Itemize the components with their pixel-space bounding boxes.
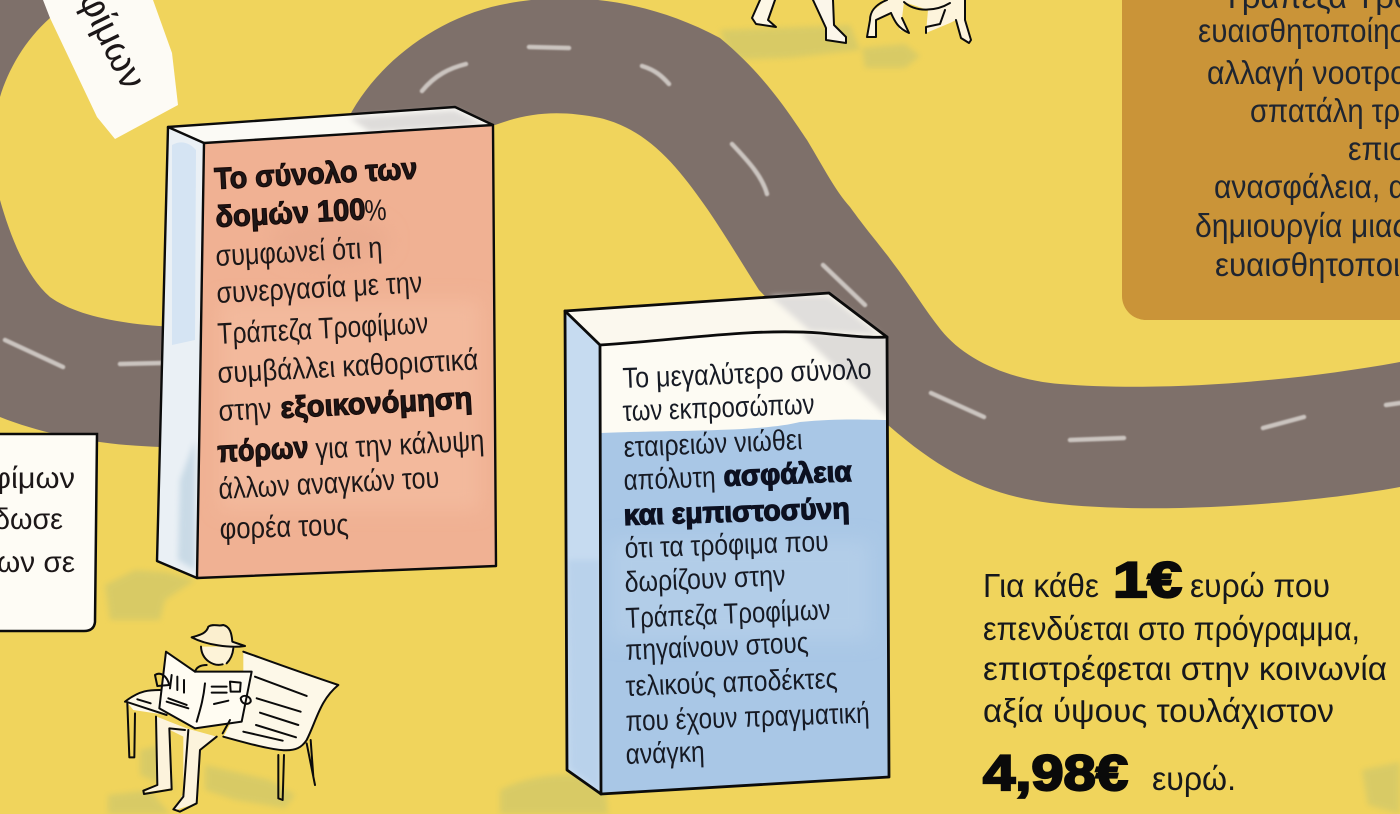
callout: return on investment: αξία ύψους τουλάχιστον — [983, 692, 1334, 729]
callout: return on investment — [983, 552, 1387, 801]
box text: συμβάλλει καθοριστικά — [217, 343, 479, 390]
callout: return on investment: 1€ — [1113, 552, 1182, 608]
box text: και εμπιστοσύνη — [623, 493, 850, 532]
callout: return on investment: επενδύεται στο πρόγραμμα, — [983, 610, 1360, 647]
box front face — [197, 125, 496, 578]
box text: τελικούς αποδέκτες — [625, 663, 838, 703]
icon: walker legs and dog — [752, 0, 971, 43]
box side and top faces — [565, 293, 887, 794]
panel: blue box — [565, 293, 890, 800]
box text: ασφάλεια — [723, 456, 852, 493]
box text: εταιρειών νιώθει — [623, 424, 803, 464]
banner with rotated text — [42, 0, 178, 139]
box text: που έχουν πραγματική — [625, 697, 870, 738]
box text: άλλων αναγκών του — [218, 461, 440, 506]
box text: για την κάλυψη — [315, 424, 485, 466]
box text: πηγαίνουν στους — [625, 627, 809, 667]
box front face — [600, 332, 889, 794]
box text: στην — [218, 392, 272, 428]
box text: ανάγκη — [625, 736, 705, 771]
box text: πόρων — [217, 431, 309, 469]
box outline — [157, 107, 496, 578]
box text: Τράπεζα Τροφίμων — [625, 594, 831, 635]
callout: return on investment: 4,98€ — [983, 745, 1128, 801]
box outline — [565, 293, 889, 794]
callout: return on investment: Για κάθε — [983, 567, 1099, 604]
box text: δομών 100 — [215, 193, 366, 234]
box text: συμφωνεί ότι η — [215, 231, 383, 273]
callout: return on investment: επιστρέφεται στην κοινωνία — [983, 650, 1387, 687]
callout: return on investment: ευρώ. — [1152, 760, 1236, 797]
box text: φορέα τους — [219, 509, 349, 546]
box text: Τράπεζα Τροφίμων — [217, 307, 429, 351]
box text — [622, 353, 872, 771]
box text: Το μεγαλύτερο σύνολο — [622, 353, 872, 395]
callout: return on investment: ευρώ που — [1190, 567, 1330, 604]
box text: των εκπροσώπων — [622, 389, 815, 428]
road — [0, 0, 1400, 508]
box text — [214, 152, 485, 546]
panel: white note left — [0, 434, 97, 631]
box text: δωρίζουν στην — [624, 560, 786, 599]
box text: εξοικονόμηση — [280, 382, 473, 425]
box text: Το σύνολο των — [214, 152, 418, 196]
panel: salmon box — [157, 107, 496, 578]
box text: συνεργασία με την — [216, 266, 423, 310]
box text: ότι τα τρόφιμα που — [624, 526, 829, 565]
box text: απόλυτη — [623, 461, 716, 497]
box text: % — [364, 194, 387, 228]
road lane markings — [5, 47, 1400, 440]
box side and top faces — [157, 107, 493, 578]
panel: ochre note top right — [1122, 0, 1400, 320]
icon: man reading newspaper on bench — [125, 625, 338, 812]
